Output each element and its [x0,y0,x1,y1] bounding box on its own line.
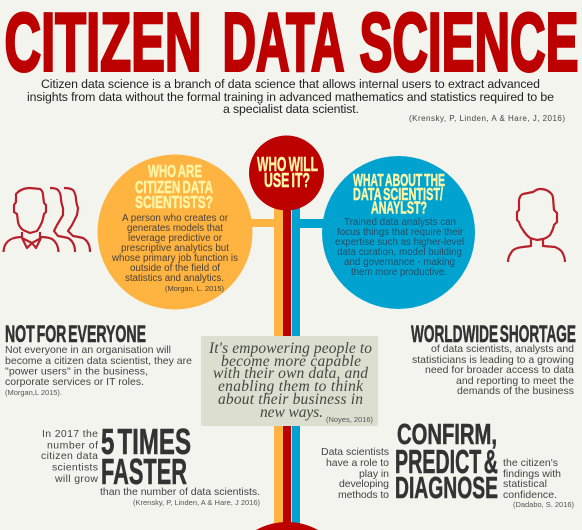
panel: quote: (Noyes, 2016) [326,415,374,424]
panel: who are citizen data scientists: leverage predictive or [128,233,223,244]
panel: five times faster: than the number of data scientists. [100,486,260,498]
panel: not for everyone: NOT FOR EVERYONE [5,321,146,348]
panel: what about the data scientist: DATA SCIENTIST/ [353,184,443,204]
intro text: insights from data without the formal training in advanced mathematics and statistics required to be [27,90,554,104]
panel: five times faster: citizen data [41,450,98,462]
panel: five times faster [41,421,260,507]
panel: not for everyone: Not everyone in an organisation will [5,344,171,356]
panel: five times faster: 5 TIMES [101,421,191,462]
panel: who will use it: WHO WILL [257,154,318,176]
panel: what about the data scientist: them more productive. [351,267,447,278]
panel: not for everyone: corporate services or IT roles. [5,376,144,388]
panel: who are citizen data scientists: outside of the field of [130,263,220,274]
panel: who are citizen data scientists: statistics and analytics. [125,273,224,284]
panel: confirm predict diagnose: confidence. [503,489,557,501]
icon: group of citizen data scientists [4,188,90,252]
title [4,0,578,88]
panel: quote [201,336,378,426]
panel: five times faster: scientists [52,462,98,474]
panel: who are citizen data scientists: A person who creates or [122,213,229,224]
panel: confirm predict diagnose: findings with [503,468,561,480]
panel: worldwide shortage: statisticians is leading to a growing [412,354,574,366]
panel: who are citizen data scientists: (Morgan, L. 2015) [165,284,224,293]
panel: quote: new ways. [260,404,323,421]
panel: what about the data scientist [322,156,475,309]
panel: what about the data scientist: WHAT ABOUT THE [353,170,445,190]
panel: quote: enabling them to think [218,378,364,395]
intro text: a specialist data scientist. [223,102,359,116]
bottom red circle [256,522,318,530]
panel: who are citizen data scientists: prescriptive analytics but [121,243,229,254]
panel: not for everyone: become a citizen data scientist, they are [5,355,192,367]
panel: what about the data scientist: and governance - making [344,257,455,268]
panel: who are citizen data scientists: whose primary job function is [111,253,238,264]
panel: confirm predict diagnose: statistical [503,478,547,490]
panel: confirm predict diagnose [321,419,574,509]
panel: five times faster: number of [47,440,98,452]
panel: what about the data scientist: ANAYLST? [371,198,427,218]
intro text: Citizen data science is a branch of data science that allows internal users to extract advanced [41,77,540,91]
panel: not for everyone: (Morgan,L 2015). [5,388,62,397]
panel: who will use it [249,136,324,210]
panel: five times faster: will grow [54,473,98,485]
panel: what about the data scientist: data curation, model building [337,247,462,258]
panel: confirm predict diagnose: methods to [338,489,389,501]
panel: confirm predict diagnose: play in [359,468,389,480]
panel: confirm predict diagnose: Data scientists [321,446,389,458]
icon: data scientist [508,189,565,262]
intro citation: (Krensky, P, Linden, A & Hare, J, 2016) [409,114,565,123]
panel: who are citizen data scientists: WHO ARE [148,161,202,181]
panel: worldwide shortage: of data scientists, analysts and [431,343,574,355]
intro text [27,77,554,116]
panel: what about the data scientist: focus things that require their [337,227,464,238]
panel: five times faster: (Krensky, P, Linden, A & Hare, J 2016) [133,498,260,507]
panel: quote: about their business in [218,391,363,408]
central timeline bars [250,200,324,530]
panel: who are citizen data scientists: generates models that [127,223,223,234]
panel: worldwide shortage: and reporting to meet the [456,375,574,387]
panel: quote: It's empowering people to [208,340,372,357]
panel: who will use it: USE IT? [264,170,310,192]
panel: five times faster: In 2017 the [42,428,98,440]
panel: not for everyone [5,321,192,397]
panel: worldwide shortage: demands of the business [457,385,574,397]
panel: confirm predict diagnose: (Dadabo, S. 2016) [513,500,574,509]
panel: what about the data scientist: Trained data analysts can [344,217,456,228]
panel: confirm predict diagnose: have a role to [326,457,389,469]
panel: quote: become more capable [221,353,361,370]
panel: who are citizen data scientists [98,154,252,310]
panel: who are citizen data scientists: CITIZEN DATA [135,177,213,197]
panel: worldwide shortage: need for broader access to data [425,364,574,376]
panel: who are citizen data scientists: SCIENTISTS? [135,192,213,212]
panel: five times faster: FASTER [101,451,187,492]
panel: quote: with their own data, and [213,365,368,382]
panel: confirm predict diagnose: DIAGNOSE [395,470,498,505]
panel: confirm predict diagnose: developing [339,478,389,490]
panel: confirm predict diagnose: CONFIRM, [397,419,497,451]
panel: worldwide shortage [411,321,576,397]
panel: confirm predict diagnose: the citizen's [503,457,558,469]
panel: confirm predict diagnose: PREDICT & [395,443,498,480]
panel: what about the data scientist: expertise such as higher-level [335,237,464,248]
panel: not for everyone: "power users" in the business, [5,366,148,378]
